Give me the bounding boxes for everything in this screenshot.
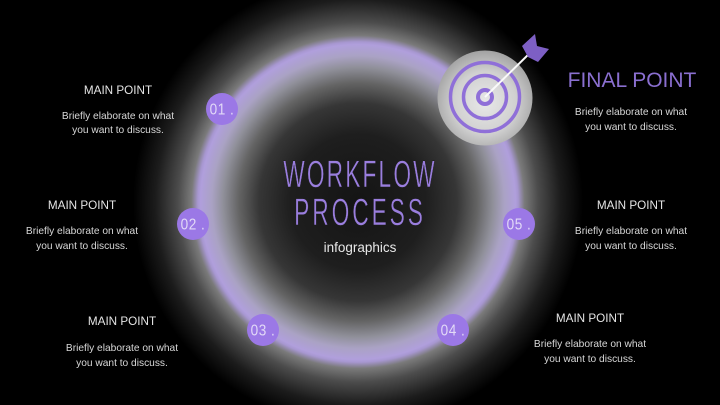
subtitle: infographics (324, 240, 397, 255)
text block: point 5: you want to discuss. (585, 241, 677, 252)
text block: point 4: you want to discuss. (544, 354, 636, 365)
text block: point 2: MAIN POINT (48, 199, 116, 212)
text block: final point: you want to discuss. (585, 122, 677, 133)
text block: point 2 (26, 199, 138, 252)
text block: point 5: Briefly elaborate on what (575, 226, 687, 237)
text block: point 3: Briefly elaborate on what (66, 343, 178, 354)
text block: point 1: Briefly elaborate on what (62, 111, 174, 122)
text block: point 2: you want to discuss. (36, 241, 128, 252)
text block: point 3: you want to discuss. (76, 358, 168, 369)
step marker 04 (437, 314, 469, 346)
step marker 05 (503, 208, 535, 240)
text block: point 1 (62, 84, 174, 136)
step marker 01: 01 . (210, 102, 234, 119)
text block: point 1: you want to discuss. (72, 125, 164, 136)
title (283, 153, 437, 233)
text block: final point (568, 69, 697, 133)
title: PROCESS (294, 191, 426, 233)
step marker 03 (247, 314, 279, 346)
text block: point 1: MAIN POINT (84, 84, 152, 97)
title: WORKFLOW (283, 153, 437, 195)
step marker 02: 02 . (181, 217, 205, 234)
step marker 03: 03 . (251, 323, 275, 340)
step marker 02 (177, 208, 209, 240)
text block: point 4: MAIN POINT (556, 312, 624, 325)
text block: point 2: Briefly elaborate on what (26, 226, 138, 237)
text block: final point: Briefly elaborate on what (575, 107, 687, 118)
step marker 05: 05 . (507, 217, 531, 234)
step marker 01 (206, 93, 238, 125)
text block: point 3: MAIN POINT (88, 315, 156, 328)
text block: point 4: Briefly elaborate on what (534, 339, 646, 350)
icon: target with arrow (438, 34, 549, 146)
text block: point 5 (575, 199, 687, 252)
text block: final point: FINAL POINT (568, 69, 697, 92)
text block: point 3 (66, 315, 178, 369)
text block: point 5: MAIN POINT (597, 199, 665, 212)
text block: point 4 (534, 312, 646, 365)
step marker 04: 04 . (441, 323, 465, 340)
